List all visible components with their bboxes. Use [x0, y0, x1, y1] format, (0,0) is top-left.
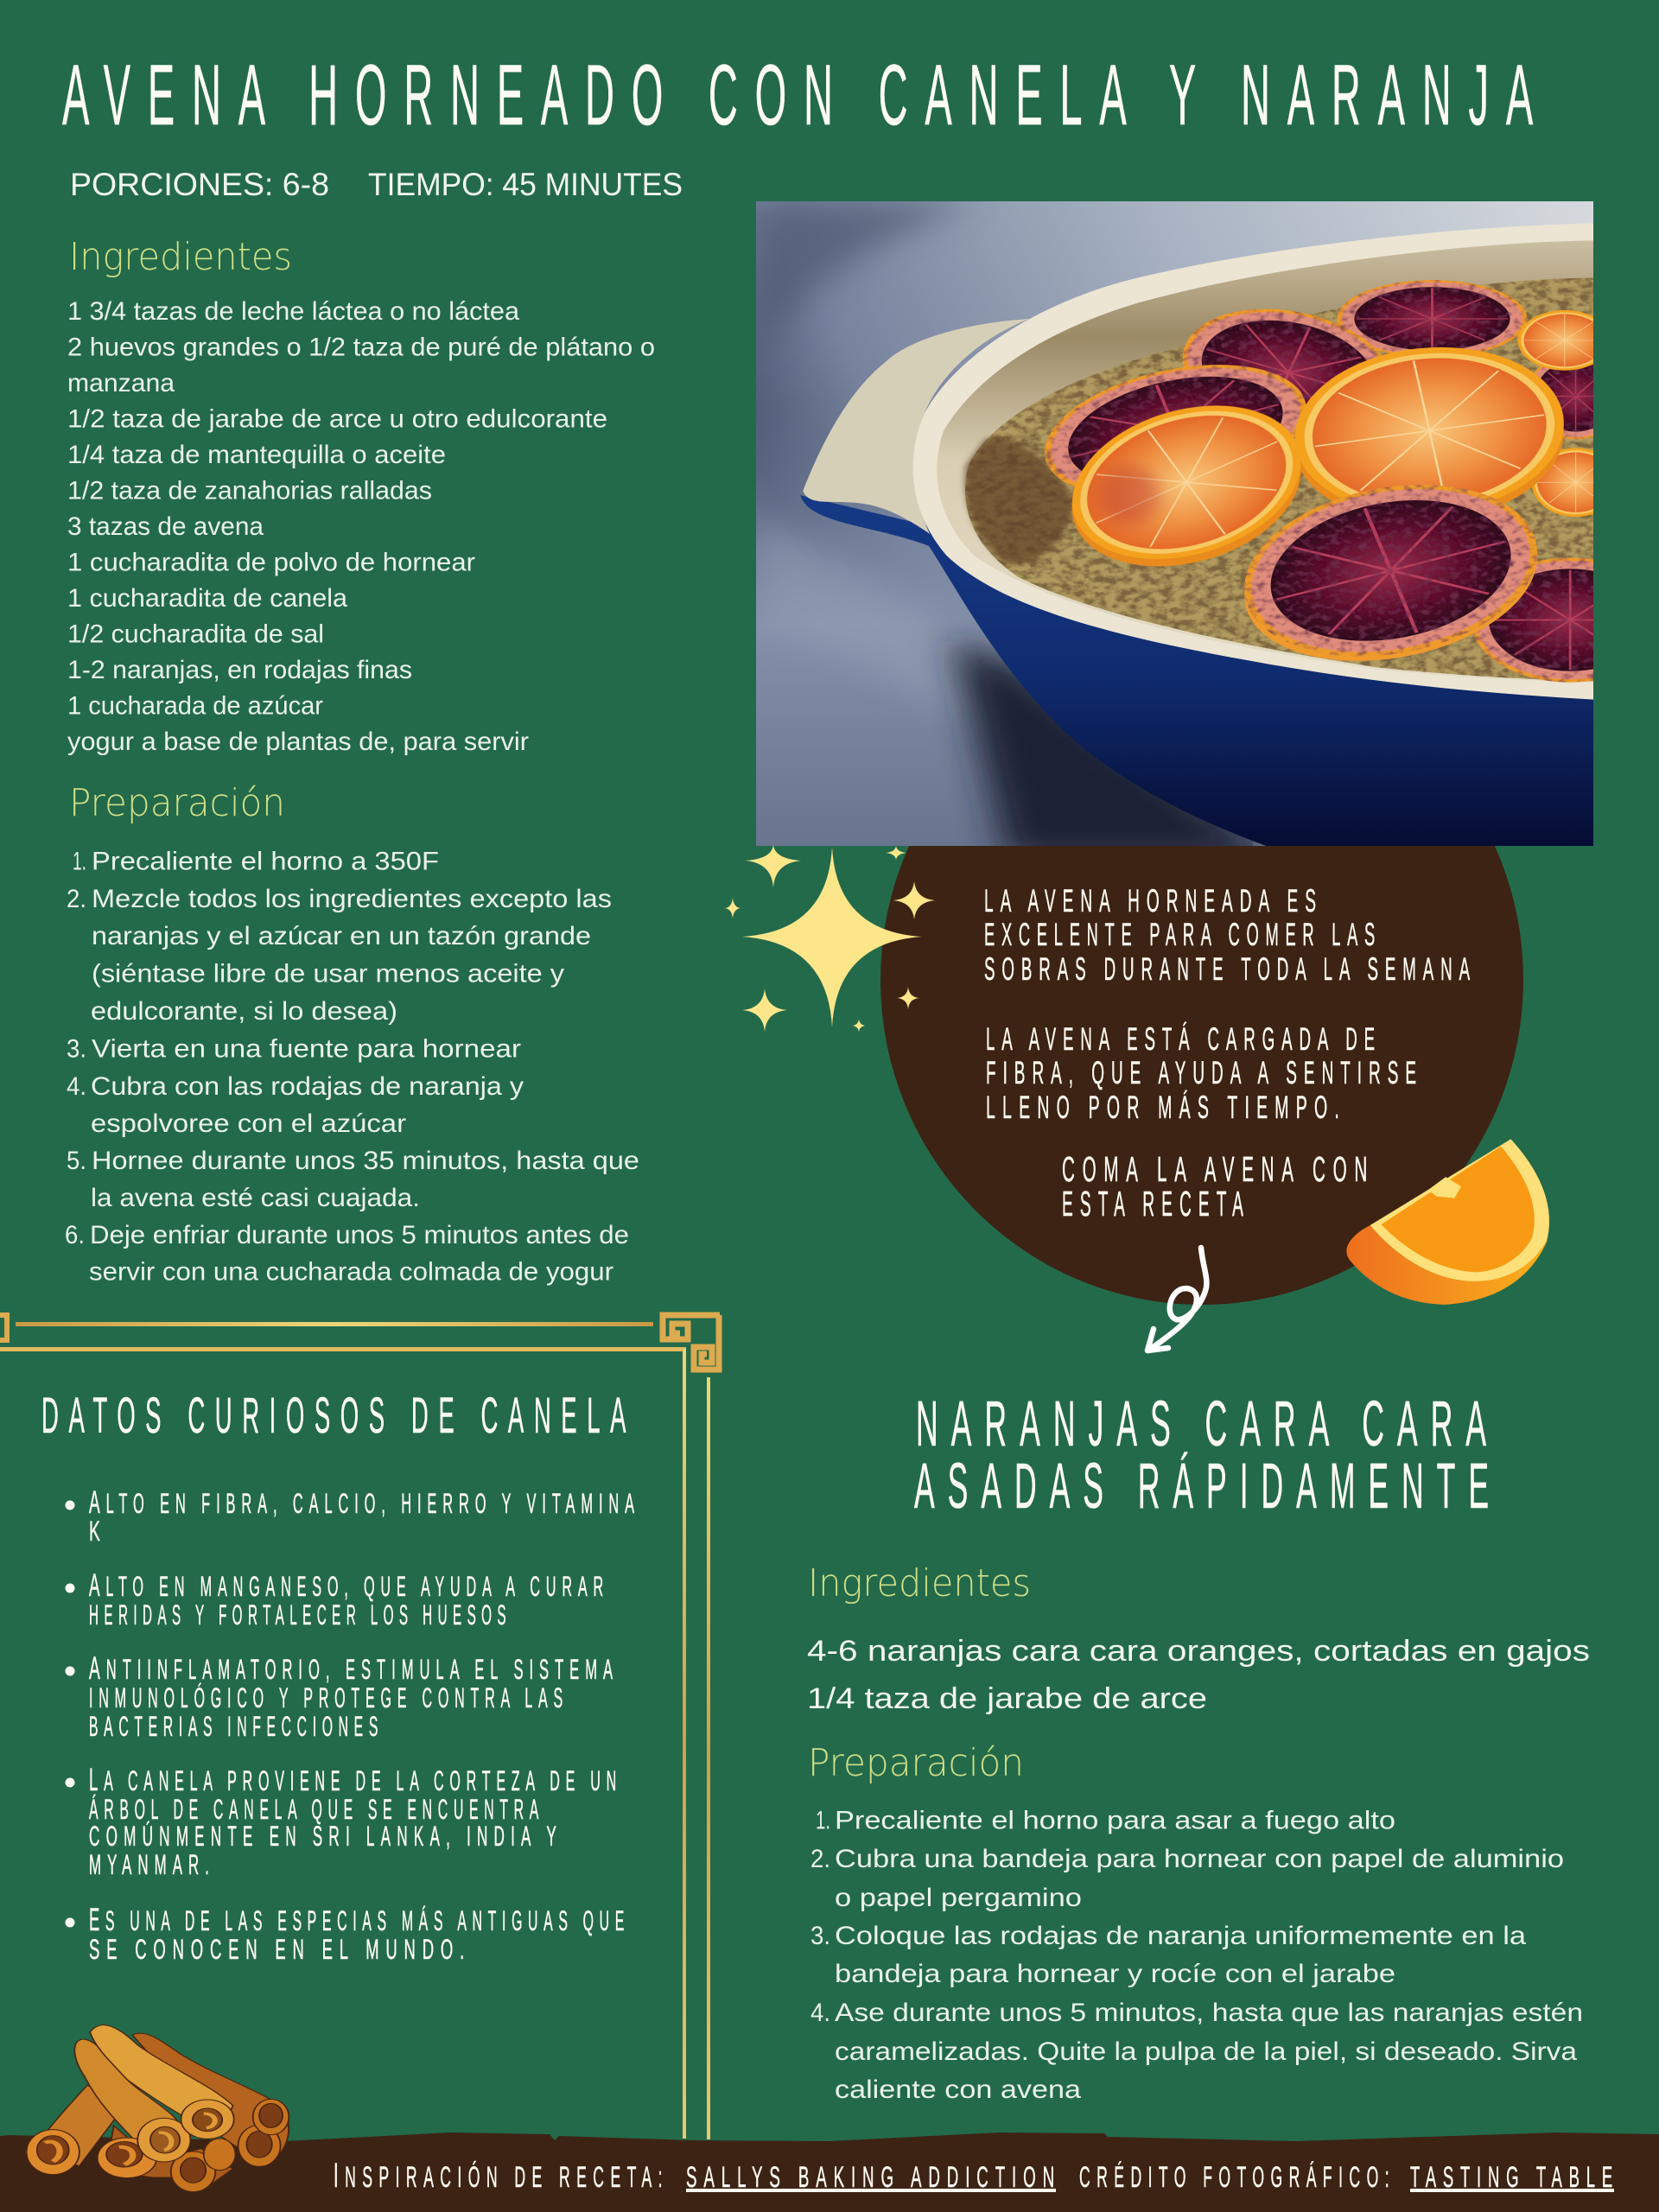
orange preparation steps: 2. — [810, 1845, 830, 1873]
orange preparation steps: o papel pergamino — [835, 1884, 1082, 1912]
orange preparation steps: caliente con avena — [835, 2075, 1081, 2104]
orange ingredient list: 4-6 naranjas cara cara oranges, cortadas en gajos — [807, 1635, 1590, 1668]
cinnamon facts list: COMÚNMENTE EN SRI LANKA, INDIA Y — [89, 1821, 563, 1852]
preparation steps: la avena esté casi cuajada. — [91, 1184, 420, 1212]
ingredient list: 1/4 taza de mantequilla o aceite — [67, 441, 446, 469]
servings and time — [70, 167, 683, 202]
preparation steps: Cubra con las rodajas de naranja y — [91, 1072, 524, 1101]
callout text in brown circle: LA AVENA HORNEADA ES — [984, 883, 1323, 918]
preparation steps: 4. — [67, 1072, 86, 1101]
ingredient list: 1 cucharadita de polvo de hornear — [67, 548, 475, 577]
callout text in brown circle: ESTA RECETA — [1062, 1184, 1250, 1224]
icon: orange wedge — [1346, 1139, 1549, 1305]
preparation steps: Vierta en una fuente para hornear — [92, 1035, 521, 1063]
panel: gold greek-key frame — [0, 1315, 720, 2139]
ingredient list: 1 cucharadita de canela — [67, 584, 348, 613]
servings and time: PORCIONES: 6-8 — [70, 167, 329, 202]
preparation steps — [65, 847, 639, 1286]
cinnamon facts list: ALTO EN MANGANESO, QUE AYUDA A CURAR — [89, 1567, 609, 1603]
icon: cinnamon sticks — [27, 2025, 289, 2192]
orange preparation steps: 3. — [810, 1922, 830, 1950]
orange preparation steps: caramelizadas. Quite la pulpa de la piel, si deseado. Sirva — [835, 2037, 1577, 2066]
cinnamon facts list: INMUNOLÓGICO Y PROTEGE CONTRA LAS — [89, 1682, 569, 1713]
preparation steps: 3. — [67, 1035, 86, 1063]
ingredient list: 2 huevos grandes o 1/2 taza de puré de plátano o — [67, 334, 655, 361]
preparation steps: 6. — [65, 1221, 85, 1249]
orange preparation steps: bandeja para hornear y rocíe con el jarabe — [835, 1960, 1395, 1988]
cinnamon facts list: SE CONOCEN EN EL MUNDO. — [89, 1934, 471, 1965]
orange ingredient list — [807, 1635, 1590, 1715]
orange preparation steps: 4. — [810, 1999, 830, 2027]
cinnamon facts list: HERIDAS Y FORTALECER LOS HUESOS — [89, 1599, 512, 1630]
heading: ingredientes: Ingredientes — [69, 235, 292, 279]
footer credits: SALLYS BAKING ADDICTION — [686, 2161, 1061, 2194]
heading: preparación: Preparación — [69, 781, 285, 825]
heading: ingredientes (oranges): Ingredientes — [808, 1561, 1031, 1605]
orange preparation steps: Cubra una bandeja para hornear con papel de aluminio — [835, 1845, 1564, 1873]
orange preparation steps: Precaliente el horno para asar a fuego alto — [835, 1806, 1395, 1835]
footer bar — [0, 2133, 1659, 2212]
ingredient list — [67, 297, 655, 756]
preparation steps: Precaliente el horno a 350F — [92, 847, 439, 876]
servings and time: TIEMPO: 45 MINUTES — [368, 167, 683, 202]
orange preparation steps: Coloque las rodajas de naranja uniformemente en la — [835, 1922, 1526, 1950]
ingredient list: 1/2 cucharadita de sal — [67, 620, 324, 648]
callout text in brown circle: LLENO POR MÁS TIEMPO. — [986, 1090, 1346, 1125]
preparation steps: (siéntase libre de usar menos aceite y — [92, 959, 564, 988]
orange preparation steps: Ase durante unos 5 minutos, hasta que las naranjas estén — [835, 1999, 1583, 2027]
cinnamon facts list: K — [89, 1516, 107, 1547]
preparation steps: 1. — [73, 847, 86, 876]
preparation steps: naranjas y el azúcar en un tazón grande — [92, 922, 591, 950]
cinnamon facts list: ALTO EN FIBRA, CALCIO, HIERRO Y VITAMINA — [89, 1484, 640, 1520]
preparation steps: 5. — [67, 1147, 86, 1175]
orange ingredient list: 1/4 taza de jarabe de arce — [807, 1682, 1207, 1715]
icon: sparkle stars — [725, 845, 935, 1032]
preparation steps: espolvoree con el azúcar — [91, 1109, 406, 1138]
ingredient list: 1/2 taza de zanahorias ralladas — [67, 477, 432, 505]
cinnamon facts list: LA CANELA PROVIENE DE LA CORTEZA DE UN — [89, 1761, 622, 1797]
ingredient list: yogur a base de plantas de, para servir — [67, 728, 529, 756]
callout text in brown circle — [984, 883, 1477, 1224]
cinnamon facts list: BACTERIAS INFECCIONES — [89, 1711, 384, 1742]
cinnamon facts list: MYANMAR. — [89, 1849, 215, 1880]
preparation steps: edulcorante, si lo desea) — [91, 997, 397, 1026]
cinnamon facts list: ANTIINFLAMATORIO, ESTIMULA EL SISTEMA — [89, 1649, 619, 1686]
brown circle panel — [880, 655, 1523, 1305]
photo: baked oatmeal with orange slices — [756, 201, 1593, 846]
heading: preparación (oranges): Preparación — [808, 1741, 1024, 1785]
orange preparation steps: 1. — [816, 1806, 830, 1835]
text: DATOS CURIOSOS DE CANELA — [41, 1388, 636, 1444]
preparation steps: Hornee durante unos 35 minutos, hasta que — [92, 1147, 639, 1175]
heading: naranjas cara cara — [914, 1388, 1502, 1522]
footer credits: INSPIRACIÓN DE RECETA: — [334, 2157, 669, 2195]
ingredient list: 1 3/4 tazas de leche láctea o no láctea — [67, 297, 520, 326]
ingredient list: 1/2 taza de jarabe de arce u otro edulcorante — [67, 404, 607, 434]
ingredient list: 1 cucharada de azúcar — [67, 691, 323, 721]
ingredient list: manzana — [67, 369, 175, 397]
cinnamon facts list: ÁRBOL DE CANELA QUE SE ENCUENTRA — [89, 1794, 544, 1825]
footer credits — [334, 2157, 1619, 2195]
arrow — [1147, 1248, 1206, 1351]
preparation steps: Deje enfriar durante unos 5 minutos antes de — [90, 1221, 629, 1249]
orange preparation steps — [810, 1806, 1583, 2104]
preparation steps: Mezcle todos los ingredientes excepto las — [92, 885, 612, 913]
ingredient list: 1-2 naranjas, en rodajas finas — [67, 656, 412, 684]
preparation steps: servir con una cucharada colmada de yogur — [89, 1258, 613, 1286]
preparation steps: 2. — [67, 885, 86, 913]
cinnamon facts list — [66, 1484, 640, 1965]
cinnamon facts list: ES UNA DE LAS ESPECIAS MÁS ANTIGUAS QUE — [89, 1901, 630, 1937]
ingredient list: 3 tazas de avena — [67, 512, 264, 541]
